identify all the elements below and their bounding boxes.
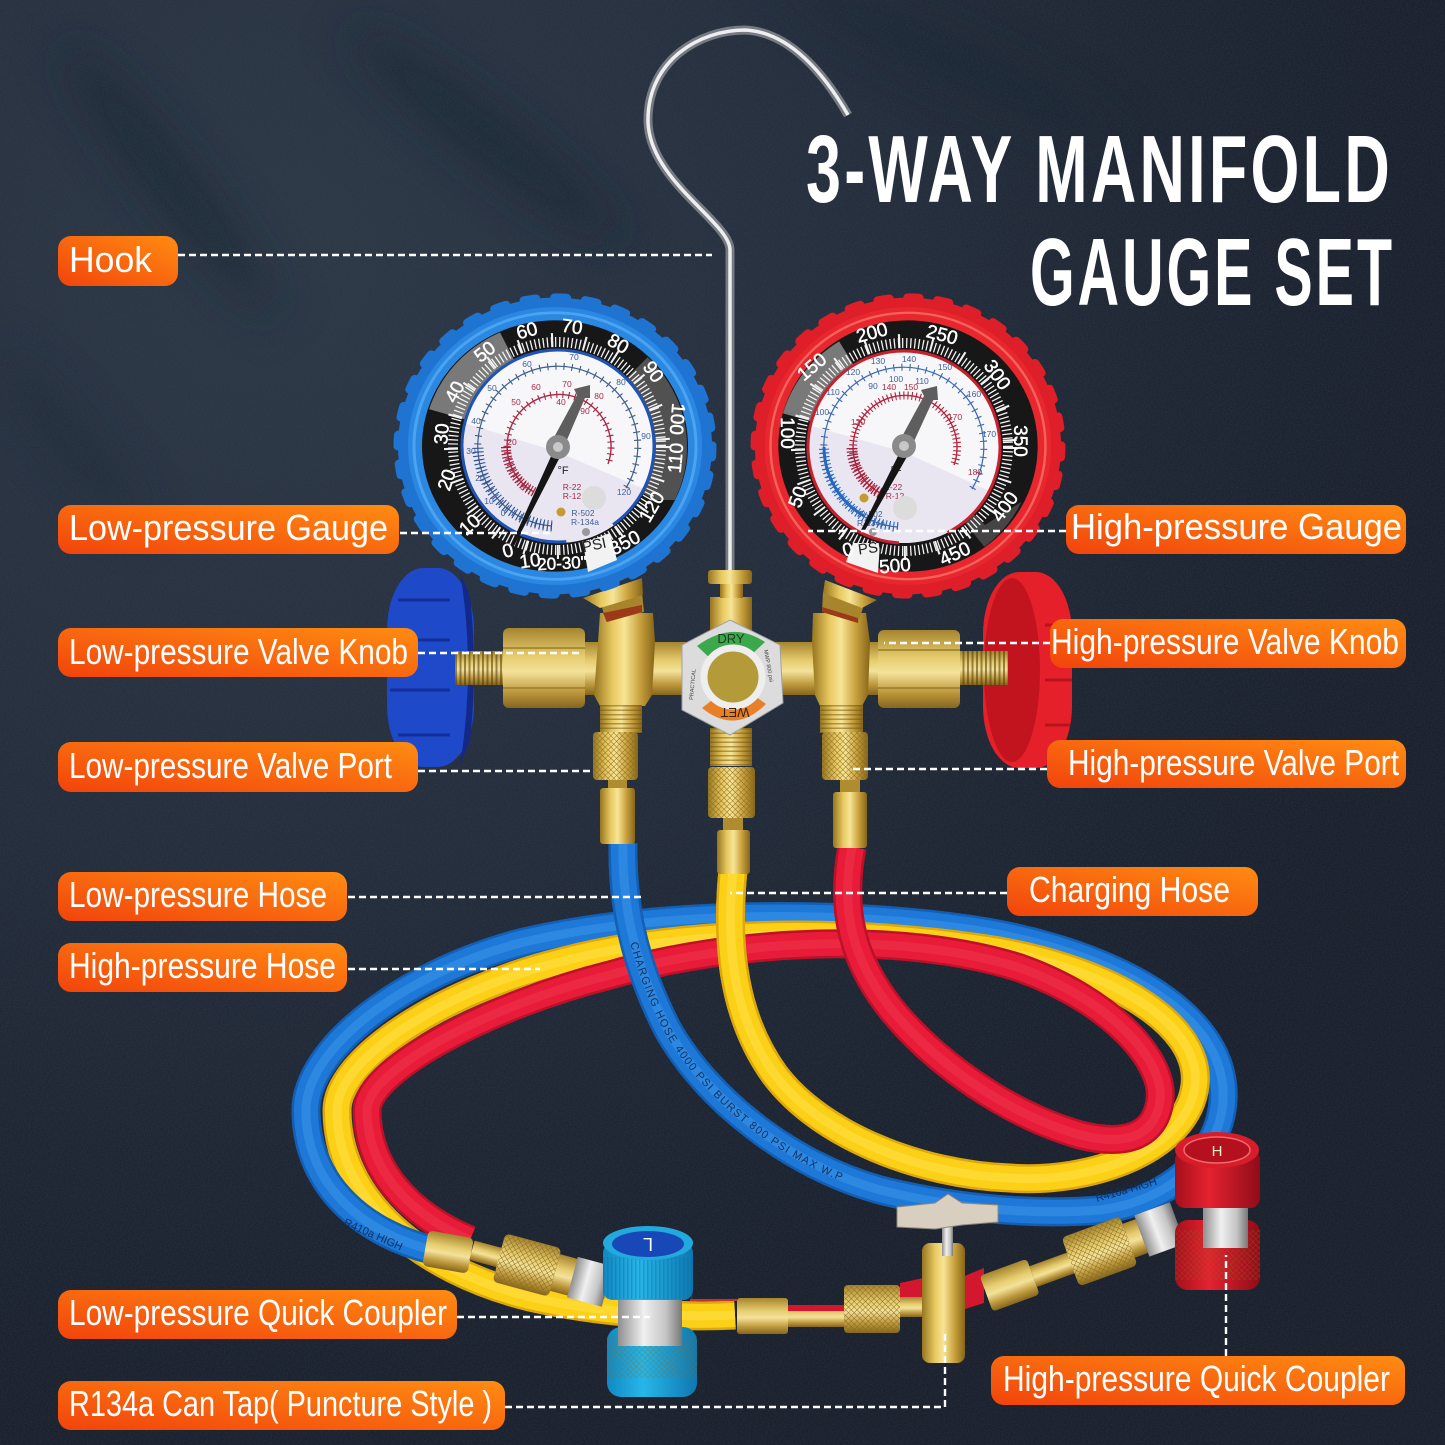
- needle: [511, 385, 590, 546]
- bezel numbers: 30: [431, 423, 454, 445]
- hose printing: R410a HIGH: [342, 1217, 404, 1253]
- thin red line above yellow hose: [690, 1299, 737, 1301]
- red valve knob: [983, 572, 1072, 768]
- bezel numbers: 0: [500, 540, 516, 563]
- dial numerals: 100: [815, 407, 829, 417]
- dial numerals: 120: [846, 367, 860, 377]
- bezel numbers: 350: [1009, 425, 1030, 457]
- dial numerals: 70: [569, 352, 579, 362]
- hose printing: CHARGING HOSE 4000 PSI BURST 800 PSI MAX W.P: [631, 942, 842, 1179]
- bezel numbers: [776, 319, 1030, 578]
- bezel numbers: 300: [979, 356, 1014, 394]
- dial numerals: 40: [471, 416, 481, 426]
- centre post: [708, 570, 752, 632]
- red hose: [367, 847, 1160, 1240]
- dial numerals: [466, 352, 651, 527]
- bezel numbers: 60: [514, 319, 540, 344]
- vertical hose sections in front: [306, 843, 1223, 1316]
- scales: [435, 323, 680, 566]
- leader lines: [178, 255, 1226, 1407]
- label: hook: Hook: [69, 239, 153, 280]
- dial numerals: R-22: [884, 482, 902, 492]
- hose printing: [342, 915, 1198, 1292]
- bezel numbers: 70: [560, 316, 584, 339]
- dial numerals: R-22: [563, 482, 581, 492]
- dial numerals: R-12: [886, 491, 904, 501]
- bezel numbers: PSI: [581, 535, 608, 556]
- dial numerals: 40: [556, 397, 566, 407]
- bezel numbers: 90: [638, 358, 667, 387]
- dial numerals: R-502: [571, 508, 595, 518]
- hook: [648, 30, 848, 575]
- dial numerals: 170: [982, 429, 996, 439]
- dial details: [556, 486, 606, 536]
- label: can tap: [58, 1381, 505, 1430]
- label: high-pressure hose: High-pressure Hose: [69, 945, 336, 986]
- bezel numbers: 10: [518, 550, 542, 573]
- dial numerals: 20: [475, 473, 485, 483]
- dial numerals: 70: [562, 379, 572, 389]
- blue hose: [306, 843, 1223, 1250]
- dial numerals: 130: [871, 356, 885, 366]
- lower left fitting: [593, 705, 642, 844]
- bezel numbers: 200: [854, 319, 890, 348]
- bezel numbers: 110: [665, 442, 688, 474]
- bezel numbers: 150: [793, 349, 831, 386]
- rubber boot: [755, 298, 1061, 594]
- dial details: [860, 494, 917, 536]
- blue valve knob: [387, 568, 474, 767]
- sight glass: MWP 800 psi: [762, 649, 774, 682]
- label: high-pressure gauge: High-pressure Gauge: [1071, 506, 1402, 547]
- dial numerals: 80: [616, 377, 626, 387]
- dial numerals: 10: [484, 496, 494, 506]
- dial numerals: 160: [967, 389, 981, 399]
- silver neck: [618, 1296, 682, 1346]
- bezel numbers: 0: [840, 539, 856, 562]
- sight glass: DRY: [717, 631, 745, 646]
- bezel numbers: 50: [471, 338, 500, 367]
- low-pressure quick coupler assembly: [422, 1226, 737, 1397]
- bezel numbers: 40: [441, 378, 470, 406]
- bezel numbers: 120: [635, 488, 669, 526]
- label: low-pressure gauge: Low-pressure Gauge: [69, 507, 388, 548]
- label: low-pressure valve knob: Low-pressure Valve Knob: [69, 631, 408, 672]
- blue coupler cap: L: [643, 1234, 653, 1254]
- dial numerals: °F: [890, 465, 902, 477]
- bezel numbers: 100: [665, 402, 688, 436]
- bezel numbers: 10: [455, 510, 485, 540]
- dial numerals: 50: [511, 397, 521, 407]
- dial numerals: 50: [487, 383, 497, 393]
- dial numerals: 90: [580, 406, 590, 416]
- right post: [812, 613, 870, 706]
- dial numerals: 140: [882, 382, 896, 392]
- bezel numbers: 250: [924, 321, 960, 350]
- dial: [808, 351, 1000, 543]
- label: can tap: R134a Can Tap( Puncture Style ): [69, 1383, 492, 1424]
- dial numerals: 90: [868, 381, 878, 391]
- PSI wedge: [846, 543, 880, 573]
- dial numerals: 90: [641, 431, 651, 441]
- grey glare sectors: [783, 342, 1022, 547]
- left post: [594, 613, 655, 706]
- yellow hose: [337, 870, 1195, 1316]
- bezel numbers: 20: [434, 467, 461, 493]
- bezel numbers: 450: [936, 538, 974, 571]
- needle: [861, 386, 938, 532]
- high-pressure quick coupler: H: [1212, 1143, 1222, 1160]
- bezel numbers: 50: [785, 484, 812, 511]
- left hex nut: [503, 628, 585, 708]
- label: low-pressure valve port: Low-pressure Valve Port: [69, 745, 392, 786]
- horizontal bar: [575, 642, 885, 695]
- scales: [790, 333, 1017, 558]
- T body: [922, 1243, 965, 1363]
- dial: [461, 349, 655, 543]
- tick ring: [451, 340, 663, 552]
- brass ferrule: [422, 1230, 474, 1274]
- dial numerals: 140: [902, 354, 916, 364]
- dial numerals: 30: [520, 482, 530, 492]
- dial numerals: 150: [938, 362, 952, 372]
- blue coupler base: [607, 1327, 697, 1397]
- dial numerals: R-502: [859, 509, 883, 519]
- dial numerals: 60: [522, 359, 532, 369]
- dial numerals: 30: [466, 446, 476, 456]
- dial numerals: 120: [617, 487, 631, 497]
- dial numerals: [815, 354, 996, 528]
- dial numerals: 110: [826, 387, 840, 397]
- rubber boot: [398, 298, 712, 594]
- label: hook: [58, 236, 178, 286]
- hose printing: R410a HIGH: [1095, 1176, 1158, 1205]
- sight glass: PRACTICAL: [689, 669, 698, 700]
- dial numerals: R-134a: [571, 517, 599, 527]
- high-pressure quick coupler: [1175, 1132, 1260, 1290]
- PSI wedge: [583, 533, 617, 572]
- right fittings: [977, 1199, 1186, 1317]
- bezel numbers: PSI: [857, 538, 883, 559]
- bezel numbers: 80: [603, 330, 632, 359]
- handle shaft: [942, 1226, 953, 1256]
- dial numerals: 120: [851, 417, 865, 427]
- bezel numbers: [431, 316, 688, 574]
- bezel numbers: 100: [776, 417, 797, 449]
- bezel numbers: 500: [878, 555, 912, 578]
- grey glare sectors: [429, 332, 687, 500]
- blue hose lower-left end in front: [306, 1110, 432, 1250]
- bezel numbers: 20-30": [537, 553, 587, 574]
- dial numerals: 150: [904, 382, 918, 392]
- dial numerals: 170: [948, 412, 962, 422]
- dial numerals: R-134a: [857, 518, 885, 528]
- bezel numbers: 400: [988, 488, 1023, 526]
- dial numerals: 100: [889, 374, 903, 384]
- right hex nut: [878, 630, 960, 708]
- tick ring: [798, 341, 1010, 553]
- screws: [455, 651, 1008, 685]
- high-pressure gauge: [755, 298, 1061, 594]
- left gauge collar: [583, 578, 644, 622]
- sight glass: WET: [721, 705, 749, 720]
- dial numerals: 180: [968, 467, 982, 477]
- dial numerals: 110: [915, 376, 929, 386]
- bezel numbers: 350: [606, 527, 644, 560]
- label: low-pressure hose: Low-pressure Hose: [69, 874, 327, 915]
- hoses: [306, 843, 1223, 1316]
- dial numerals: °F: [557, 465, 569, 477]
- dial numerals: 60: [531, 382, 541, 392]
- lower centre fitting: [708, 728, 755, 874]
- sight glass: [682, 620, 783, 735]
- dial numerals: 0: [501, 508, 506, 518]
- can tap assembly: [737, 1194, 1186, 1363]
- label: charging hose: Charging Hose: [1029, 869, 1230, 910]
- lower right fitting: [820, 705, 868, 848]
- label: low-pressure quick coupler: Low-pressure Quick Coupler: [69, 1292, 447, 1333]
- low-pressure gauge: [398, 298, 712, 594]
- right gauge collar: [822, 580, 877, 623]
- brass fittings: [465, 1226, 614, 1311]
- lower tube segments: [737, 1268, 984, 1334]
- dial numerals: 20: [507, 437, 517, 447]
- dial numerals: R-12: [563, 491, 581, 501]
- dial numerals: 80: [594, 391, 604, 401]
- T handle: [897, 1194, 998, 1229]
- blue coupler cap: [603, 1226, 693, 1300]
- manifold body: [455, 570, 1008, 874]
- title: [806, 116, 1395, 326]
